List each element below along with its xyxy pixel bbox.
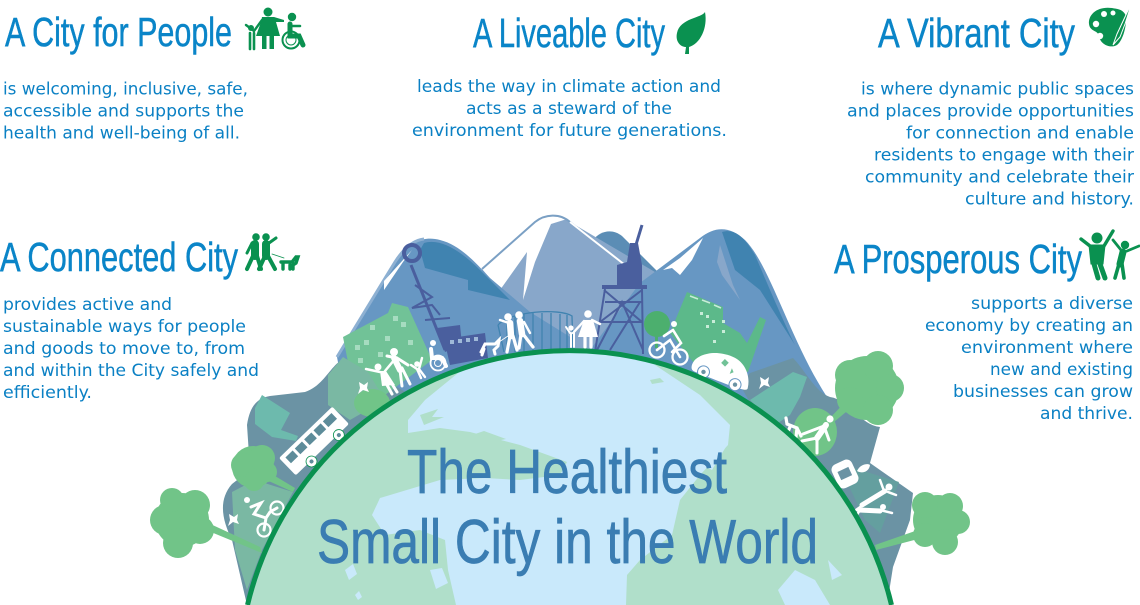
car — [689, 344, 757, 395]
globe: land masses — [250, 360, 890, 605]
family: woman, man and child — [366, 348, 425, 394]
mother and child — [566, 310, 600, 347]
icon: two walkers and a dog — [247, 233, 298, 269]
body text: a liveable city: leads the way in climate action and — [417, 77, 721, 97]
title: Small City in the World — [317, 508, 818, 577]
body text: a prosperous city: businesses can grow — [953, 382, 1133, 402]
body text: a connected city: and within the City safely and — [3, 361, 259, 381]
panel: a liveable city — [412, 10, 727, 141]
hills: grey-blue right — [740, 358, 913, 605]
body text: a vibrant city: residents to engage with their — [874, 146, 1134, 166]
globe — [248, 351, 892, 605]
body text: a liveable city — [412, 77, 727, 141]
mountain: left peak — [337, 239, 575, 400]
body text: a prosperous city: new and existing — [990, 360, 1133, 380]
body text: a city for people — [3, 80, 248, 144]
body text: a city for people: is welcoming, inclusive, safe, — [3, 80, 248, 100]
cyclist: lower left — [244, 497, 284, 536]
body text: a vibrant city: and places provide opportunities — [847, 102, 1134, 122]
body text: a city for people: accessible and supports the — [3, 102, 244, 122]
wheelchair user — [430, 340, 446, 370]
body text: a liveable city: environment for future generations. — [412, 121, 727, 141]
tree: upper right — [828, 351, 904, 425]
panel: a vibrant city — [847, 2, 1134, 210]
hills: grey-blue left — [223, 358, 420, 605]
panel: a connected city — [0, 233, 298, 403]
title — [317, 438, 818, 577]
panel: a prosperous city — [834, 231, 1139, 424]
tower: left mast and rooftops — [404, 245, 488, 365]
body text: a prosperous city: and thrive. — [1040, 404, 1133, 424]
tree: lower right — [875, 492, 970, 555]
body text: a connected city — [3, 295, 259, 403]
body text: a prosperous city: supports a diverse — [971, 294, 1133, 314]
body text: a connected city: provides active and — [3, 295, 172, 315]
panel: a city for people — [3, 8, 303, 144]
cyclist: right — [650, 321, 688, 364]
tree: middle left — [231, 445, 295, 492]
body text: a city for people: health and well-being of all. — [3, 124, 240, 144]
illustration: city skyline on the globe — [150, 215, 970, 605]
icon: jumping adult and child — [1081, 231, 1139, 278]
mountain: middle snowy peak — [482, 215, 660, 400]
buildings: left green apartment blocks — [328, 303, 432, 420]
body text: a vibrant city: is where dynamic public spaces — [861, 80, 1134, 100]
house: left teal — [255, 395, 298, 441]
body text: a vibrant city: community and celebrate their — [865, 168, 1134, 188]
body text: a connected city: efficiently. — [3, 383, 92, 403]
body text: a connected city: and goods to move to, from — [3, 339, 245, 359]
house: right teal — [750, 372, 807, 425]
body text: a prosperous city: environment where — [961, 338, 1133, 358]
buildings: right-side teal block — [838, 463, 899, 533]
walkers and dog — [481, 311, 533, 355]
heading: a city for people: A City for People — [5, 9, 232, 55]
globe: lakes — [345, 448, 842, 605]
icon: star right — [759, 377, 770, 389]
heading: a liveable city: A Liveable City — [473, 10, 665, 56]
tower: lattice lookout — [595, 225, 647, 354]
bush: left — [354, 389, 390, 417]
bush: dog walker background — [793, 408, 837, 456]
building: right green block — [670, 292, 766, 372]
body text: a prosperous city: economy by creating an — [925, 316, 1133, 336]
reclining people — [853, 480, 896, 521]
bus — [279, 407, 353, 480]
icon: star lower left — [228, 514, 239, 526]
small car and leaf — [830, 458, 870, 490]
heading: a vibrant city: A Vibrant City — [878, 10, 1075, 56]
mountain: right peak — [590, 229, 827, 430]
buildings: bottom-left teal — [232, 480, 293, 590]
heading: a connected city: A Connected City — [0, 234, 238, 280]
icon: star left — [358, 382, 369, 394]
tree: lower left — [150, 488, 262, 558]
dog walker — [786, 415, 834, 453]
dome: stadium — [498, 312, 573, 352]
icon: paint palette — [1089, 2, 1132, 46]
body text: a vibrant city: for connection and enable — [906, 124, 1134, 144]
tree: dark green small — [644, 311, 670, 348]
globe: green rim — [248, 351, 892, 605]
body text: a connected city: sustainable ways for people — [3, 317, 246, 337]
title: The Healthiest — [407, 438, 727, 507]
globe: ocean — [248, 351, 892, 605]
body text: a liveable city: acts as a steward of the — [466, 99, 672, 119]
body text: a vibrant city — [847, 80, 1134, 210]
icon: leaf — [677, 12, 706, 54]
icon: family and wheelchair user — [246, 8, 303, 49]
body text: a prosperous city — [925, 294, 1133, 424]
body text: a vibrant city: culture and history. — [965, 190, 1134, 210]
